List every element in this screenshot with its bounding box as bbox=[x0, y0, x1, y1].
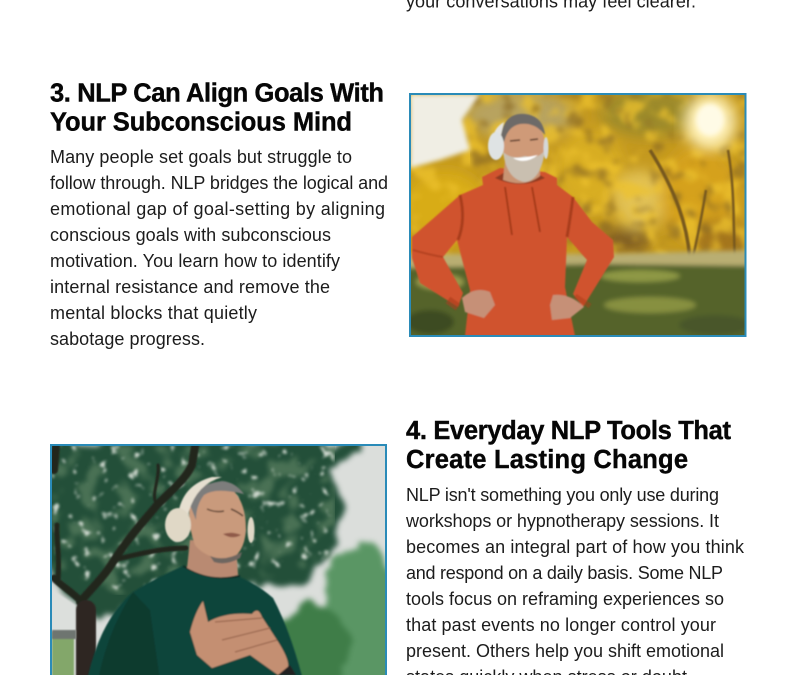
sky bbox=[410, 94, 480, 168]
neck and head bbox=[502, 162, 541, 184]
far tree, lower right bbox=[282, 538, 385, 675]
heading: section 3: Your Subconscious Mind bbox=[50, 108, 352, 136]
photo: man with headphones and hands on chest under a tree bbox=[45, 440, 402, 675]
heading: section 4: 4. Everyday NLP Tools That bbox=[406, 417, 732, 445]
tree trunk and branches bbox=[54, 440, 196, 675]
heading: section 3 bbox=[50, 80, 384, 136]
text block: section 3 body: conscious goals with subconscious bbox=[50, 225, 331, 245]
text block: section 4 body: present. Others help you shift emotional bbox=[406, 641, 724, 661]
text block: section 4 body: that past events no longer control your bbox=[406, 615, 716, 635]
text block: section 4 body bbox=[405, 485, 745, 675]
text block: section 4 body: becomes an integral part of how you think bbox=[406, 537, 745, 557]
photo: smiling man in orange hoodie in an autumn park bbox=[400, 88, 760, 342]
text block: section 3 body: motivation. You learn how to identify bbox=[50, 251, 340, 271]
text block: section 3 body bbox=[50, 147, 388, 349]
grass bbox=[411, 248, 744, 335]
head bbox=[189, 486, 246, 560]
text block: section 3 body: sabotage progress. bbox=[50, 329, 205, 349]
text block: section 4 body: and respond on a daily basis. Some NLP bbox=[406, 563, 723, 583]
heading: section 4: Create Lasting Change bbox=[406, 446, 688, 474]
heading: section 4 bbox=[406, 417, 732, 474]
hoodie bbox=[412, 114, 614, 336]
text block: section 4 body: workshops or hypnotherapy sessions. It bbox=[405, 511, 719, 531]
text block: section 3 body: internal resistance and remove the bbox=[50, 277, 330, 297]
text block: section 3 body: Many people set goals but struggle to bbox=[50, 147, 352, 167]
text block: section 3 body: mental blocks that quietly bbox=[50, 303, 257, 323]
neck bbox=[187, 540, 238, 577]
heading: section 3: 3. NLP Can Align Goals With bbox=[50, 80, 384, 108]
text block: section 3 body: emotional gap of goal-setting by aligning bbox=[50, 199, 385, 219]
text block: section 4 body: NLP isn't something you only use during bbox=[406, 485, 719, 505]
text block: section 4 body: tools focus on reframing experiences so bbox=[406, 589, 724, 609]
hands bbox=[462, 290, 495, 318]
text block: section 3 body: follow through. NLP bridges the logical and bbox=[50, 173, 388, 193]
sky gap, lower left bbox=[60, 596, 75, 607]
canopy bbox=[45, 440, 375, 620]
sweater bbox=[87, 566, 303, 675]
headphones bbox=[165, 508, 191, 542]
hands bbox=[190, 601, 288, 675]
fence bbox=[52, 632, 74, 675]
